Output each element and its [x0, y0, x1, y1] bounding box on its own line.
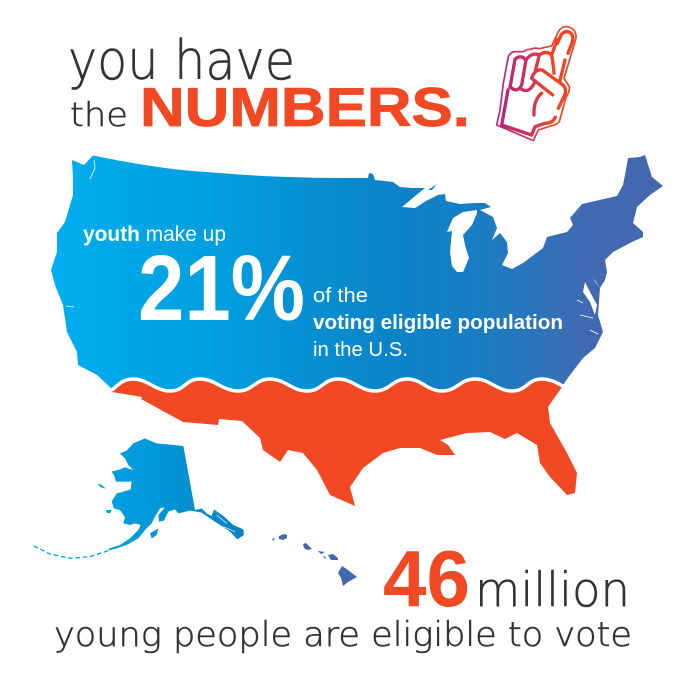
map: Alaska [32, 438, 244, 558]
big number: 21%: 21% [138, 236, 305, 340]
title word: the: the [70, 95, 128, 134]
stat unit: million: million [475, 563, 630, 618]
map: contiguous United States [51, 155, 663, 506]
text: youth make up: youth make up [83, 223, 226, 246]
title [68, 29, 470, 138]
chesapeake bay [583, 276, 600, 315]
coastal inlets [66, 160, 598, 334]
map region: orange southern states [112, 379, 577, 506]
stat number: 46: 46 [383, 534, 470, 623]
lake michigan [447, 210, 477, 272]
title word: NUMBERS.: NUMBERS. [140, 76, 470, 138]
icon: foam finger hand [497, 27, 576, 141]
map region: blue upper states [51, 155, 663, 391]
text line: in the U.S.: in the U.S. [313, 339, 408, 361]
text line: of the: of the [313, 285, 368, 307]
text: of the voting eligible population in the U.S. [313, 285, 563, 361]
white wave divider [112, 379, 563, 391]
isle royale [428, 184, 437, 190]
title line: you have: you have [68, 29, 295, 92]
text line: voting eligible population: voting eligible population [313, 312, 563, 334]
stat caption: young people are eligible to vote [54, 615, 632, 655]
map: Hawaii [272, 534, 357, 586]
stat: 46 million young people are eligible to vote [54, 534, 632, 655]
